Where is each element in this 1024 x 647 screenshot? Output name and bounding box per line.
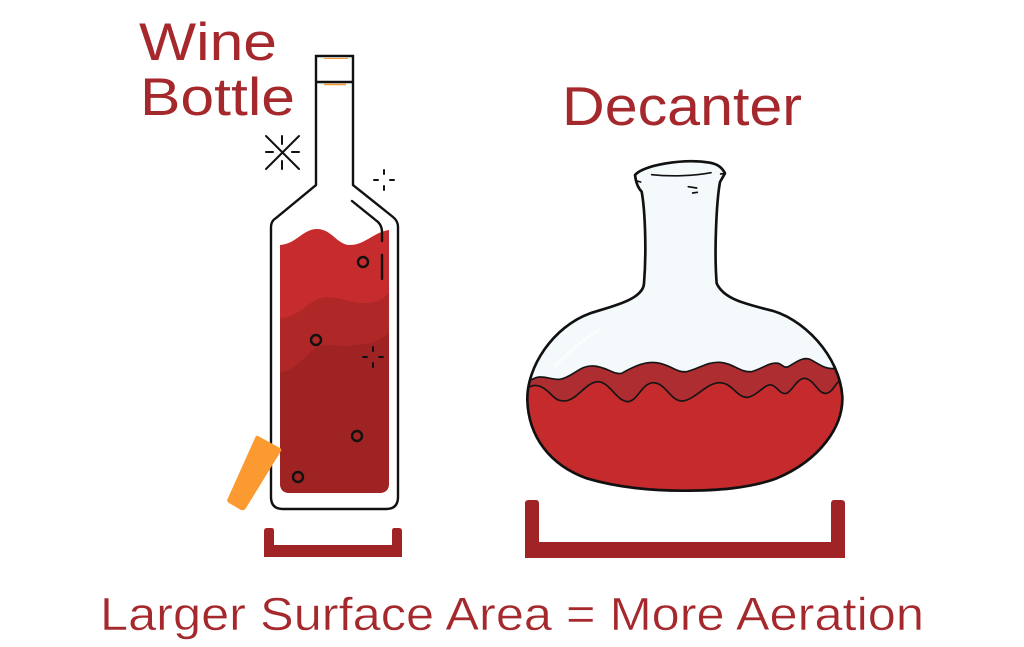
caption: Larger Surface Area = More Aeration <box>100 588 924 640</box>
bubbles <box>293 257 368 482</box>
decanter wine body <box>523 378 847 497</box>
heading: wine bottle: Bottle <box>140 68 295 127</box>
decanter outline <box>527 161 842 491</box>
wine bottle illustration <box>227 56 398 510</box>
heading: decanter: Decanter <box>562 75 802 137</box>
bottle outline <box>271 56 398 509</box>
cork <box>227 436 281 510</box>
decanter glass highlight <box>555 329 599 367</box>
decanter surface line <box>532 359 835 380</box>
heading: wine bottle <box>139 13 295 127</box>
decanter lip details <box>636 173 725 193</box>
decanter illustration <box>523 161 847 497</box>
wine: bottom layer <box>280 332 389 493</box>
sparkle: large <box>266 136 299 169</box>
sparkle: upper right <box>374 170 394 190</box>
decanter glass <box>527 161 842 491</box>
decanter wine surface <box>530 360 838 401</box>
bracket: decanter width <box>525 500 845 558</box>
wine: top layer <box>280 229 389 493</box>
heading: wine bottle: Wine <box>139 13 277 72</box>
bottle cork band <box>316 81 353 83</box>
bracket: bottle width <box>264 528 402 557</box>
decanter wave line <box>528 378 840 402</box>
sparkle: inside wine <box>363 347 383 367</box>
bottle highlight <box>352 201 382 279</box>
wine: middle layer <box>280 292 389 493</box>
